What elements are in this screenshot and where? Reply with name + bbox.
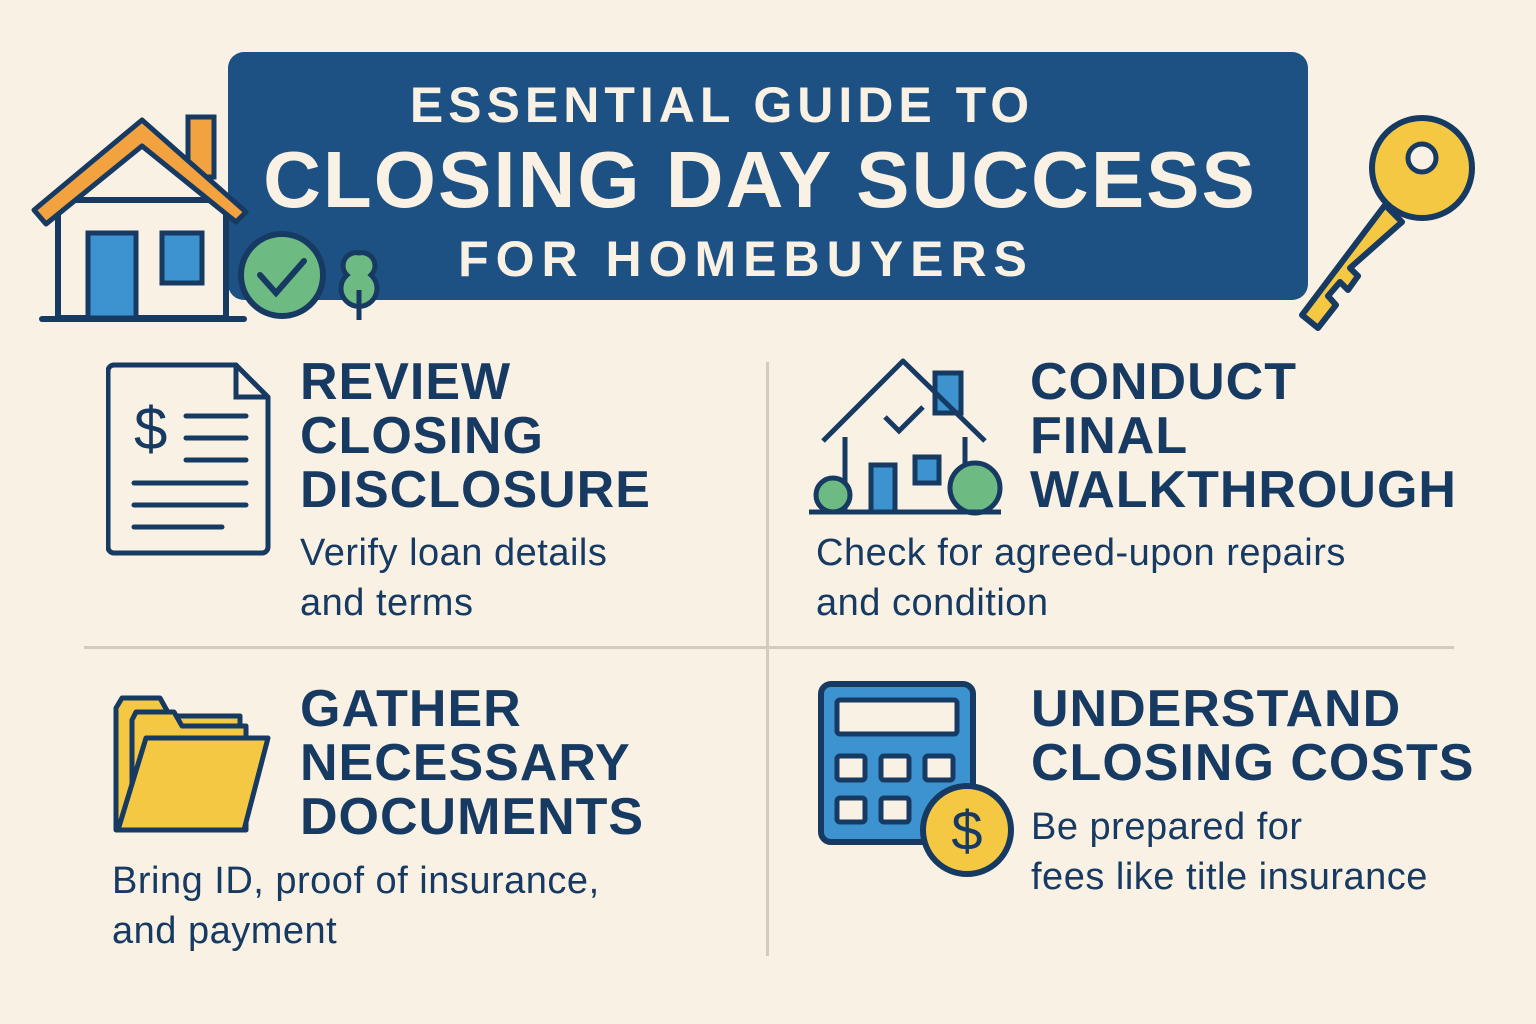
heading: DISCLOSURE [300,461,651,519]
body text [816,532,1346,624]
heading [1031,680,1474,792]
heading: CONDUCT [1030,353,1297,411]
title line 3: FOR HOMEBUYERS [458,231,1034,287]
body text [1031,806,1428,898]
panel: review closing disclosure [106,353,651,624]
panel: gather documents [112,680,644,952]
body text: Verify loan details [300,532,607,574]
title banner [228,52,1308,300]
body text: Be prepared for [1031,806,1303,848]
heading: REVIEW [300,353,511,411]
icon: calculator with coin [818,681,1014,877]
body text: and payment [112,910,337,952]
body text: and condition [816,582,1049,624]
body text [112,860,600,952]
dividers [84,646,1454,649]
icon: house with check [809,358,1002,516]
body text [300,532,607,624]
icon: folder [114,696,270,832]
heading: NECESSARY [300,734,631,792]
heading: CLOSING [300,407,544,465]
body text: fees like title insurance [1031,856,1428,898]
heading: FINAL [1030,407,1188,465]
heading: CLOSING COSTS [1031,734,1474,792]
body text: Bring ID, proof of insurance, [112,860,600,902]
body text: Check for agreed-upon repairs [816,532,1346,574]
heading [300,680,644,846]
icon: document [106,362,270,556]
panel: closing costs [818,680,1474,898]
icon: house with check and tree [32,114,380,322]
icon: key [1299,115,1475,331]
heading [300,353,651,519]
title line 2: CLOSING DAY SUCCESS [263,135,1257,224]
heading [1030,353,1457,519]
heading: WALKTHROUGH [1030,461,1457,519]
title line 1: ESSENTIAL GUIDE TO [410,77,1034,133]
body text: and terms [300,582,473,624]
heading: UNDERSTAND [1031,680,1401,738]
panel: final walkthrough [809,353,1457,624]
icon: calculator with coin: $ [951,799,983,862]
icon: document: $ [134,395,167,462]
heading: GATHER [300,680,522,738]
heading: DOCUMENTS [300,788,644,846]
